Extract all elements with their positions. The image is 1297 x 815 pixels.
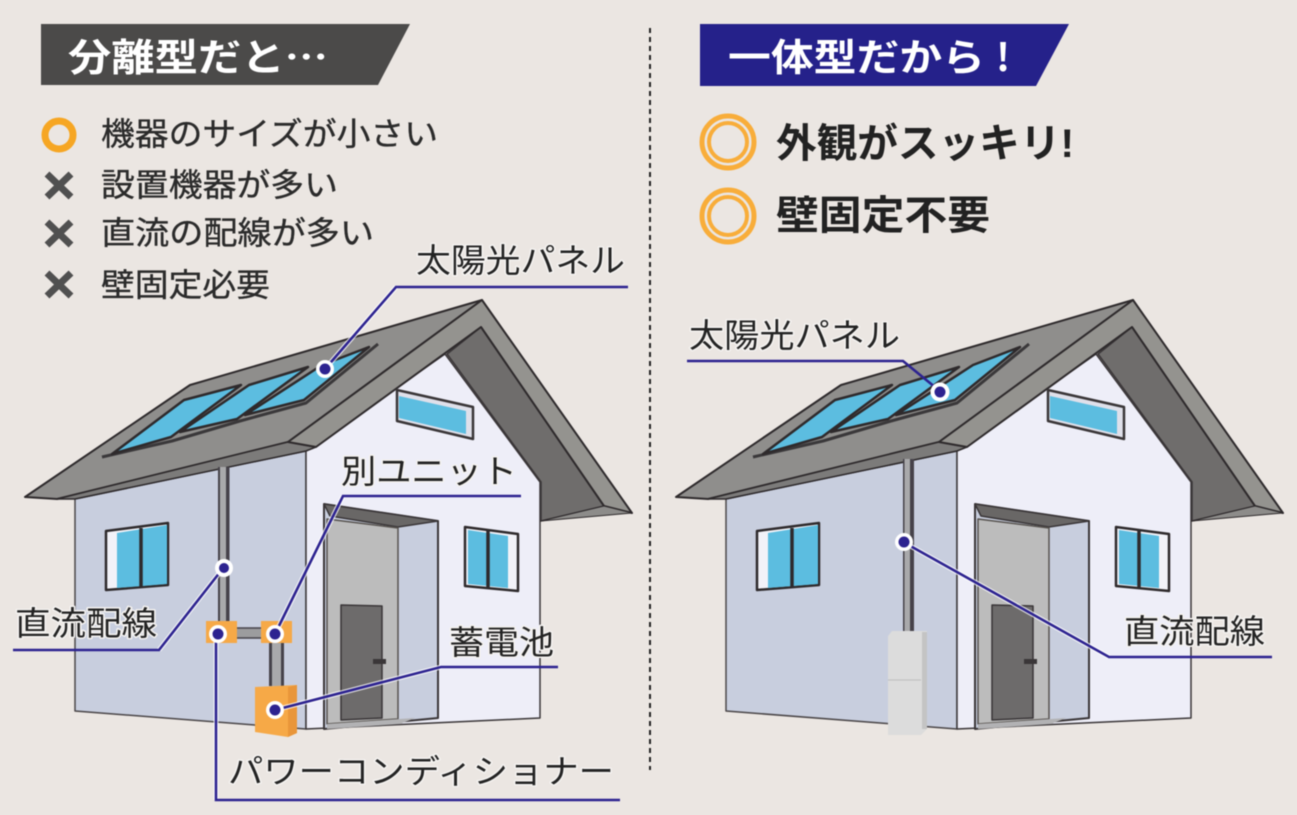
benefit: clean exterior: 外観がスッキリ!: [776, 122, 1074, 166]
label: storage battery: 蓄電池: [449, 624, 554, 661]
label: solar panel (right): 太陽光パネル: [689, 317, 900, 354]
left list of drawbacks: [45, 116, 438, 303]
label: DC wiring (left): 直流配線: [15, 605, 157, 642]
label: solar panel (right): [687, 317, 950, 402]
icon: cross: [47, 174, 71, 197]
integrated battery unit: [888, 631, 927, 735]
right house illustration: [676, 300, 1283, 735]
benefit: no wall mount: 壁固定不要: [776, 194, 990, 238]
house body: [25, 300, 632, 729]
left heading banner: [41, 24, 410, 85]
right list of benefits: [702, 116, 1074, 242]
icon: double circle: [702, 190, 754, 242]
label: power conditioner: [209, 625, 620, 800]
DC pipe: [903, 459, 914, 631]
orange unit 2: [261, 621, 292, 643]
right heading banner: !: [996, 27, 1010, 82]
orange unit 1: [206, 621, 237, 643]
left heading banner: 分離型だと…: [68, 27, 328, 82]
label: DC wiring (right): 直流配線: [1124, 613, 1265, 650]
icon: cross: [47, 222, 71, 245]
label: storage battery: [266, 624, 558, 719]
label: power conditioner: パワーコンディショナー: [228, 753, 614, 790]
list item: wall mount required: 壁固定必要: [101, 267, 270, 303]
battery box: [255, 685, 297, 737]
icon: circle: [45, 121, 73, 149]
list item: many units: 設置機器が多い: [101, 167, 338, 203]
label: solar panel (left): 太陽光パネル: [416, 242, 625, 279]
right heading banner: [700, 24, 1069, 86]
label: separate unit: 別ユニット: [341, 453, 517, 490]
left house illustration: [25, 300, 632, 737]
label: solar panel (left): [316, 242, 628, 378]
DC pipe: [218, 467, 284, 686]
label: DC wiring (right): [895, 533, 1272, 657]
label: DC wiring (left): [13, 559, 233, 650]
right heading banner: 一体型だから: [728, 27, 985, 82]
icon: double circle: [702, 116, 754, 168]
list item: small size: 機器のサイズが小さい: [101, 116, 438, 152]
divider: [649, 28, 651, 770]
house body: [676, 300, 1283, 729]
icon: cross: [47, 273, 71, 296]
label: separate unit: [266, 453, 521, 643]
list item: much wiring: 直流の配線が多い: [101, 215, 374, 251]
